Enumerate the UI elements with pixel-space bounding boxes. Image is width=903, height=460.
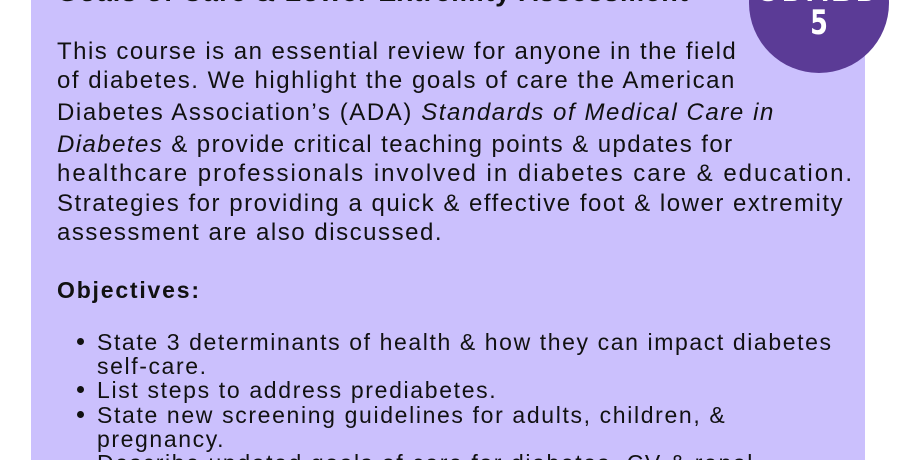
list: objectives [77,329,833,460]
icon: course code badge [749,0,889,73]
list: objectives: State new screening guidelines for adults, children, & [97,402,726,428]
list: objectives: List steps to address prediabetes. [97,377,497,403]
text block: course description: of diabetes. We highlight the goals of care the American [57,67,736,94]
text block: course description: This course is an essential review for anyone in the field [57,38,737,65]
list: objectives: pregnancy. [97,426,225,452]
text block: course description [57,38,854,246]
icon: course code badge: 5 [810,3,828,43]
heading: objectives: Objectives: [57,277,201,303]
text block: course description: assessment are also discussed. [57,219,443,246]
list: objectives: self-care. [97,353,208,379]
text block: course description: healthcare professionals involved in diabetes care & education. [57,160,854,187]
text block: course description: Diabetes & provide critical teaching points & updates for [57,131,734,158]
list: objectives: State 3 determinants of health & how they can impact diabetes [97,329,833,355]
text block: course description: Strategies for providing a quick & effective foot & lower extremity [57,190,844,217]
text block: course description: Diabetes Association’s (ADA) Standards of Medical Care in [57,99,775,126]
